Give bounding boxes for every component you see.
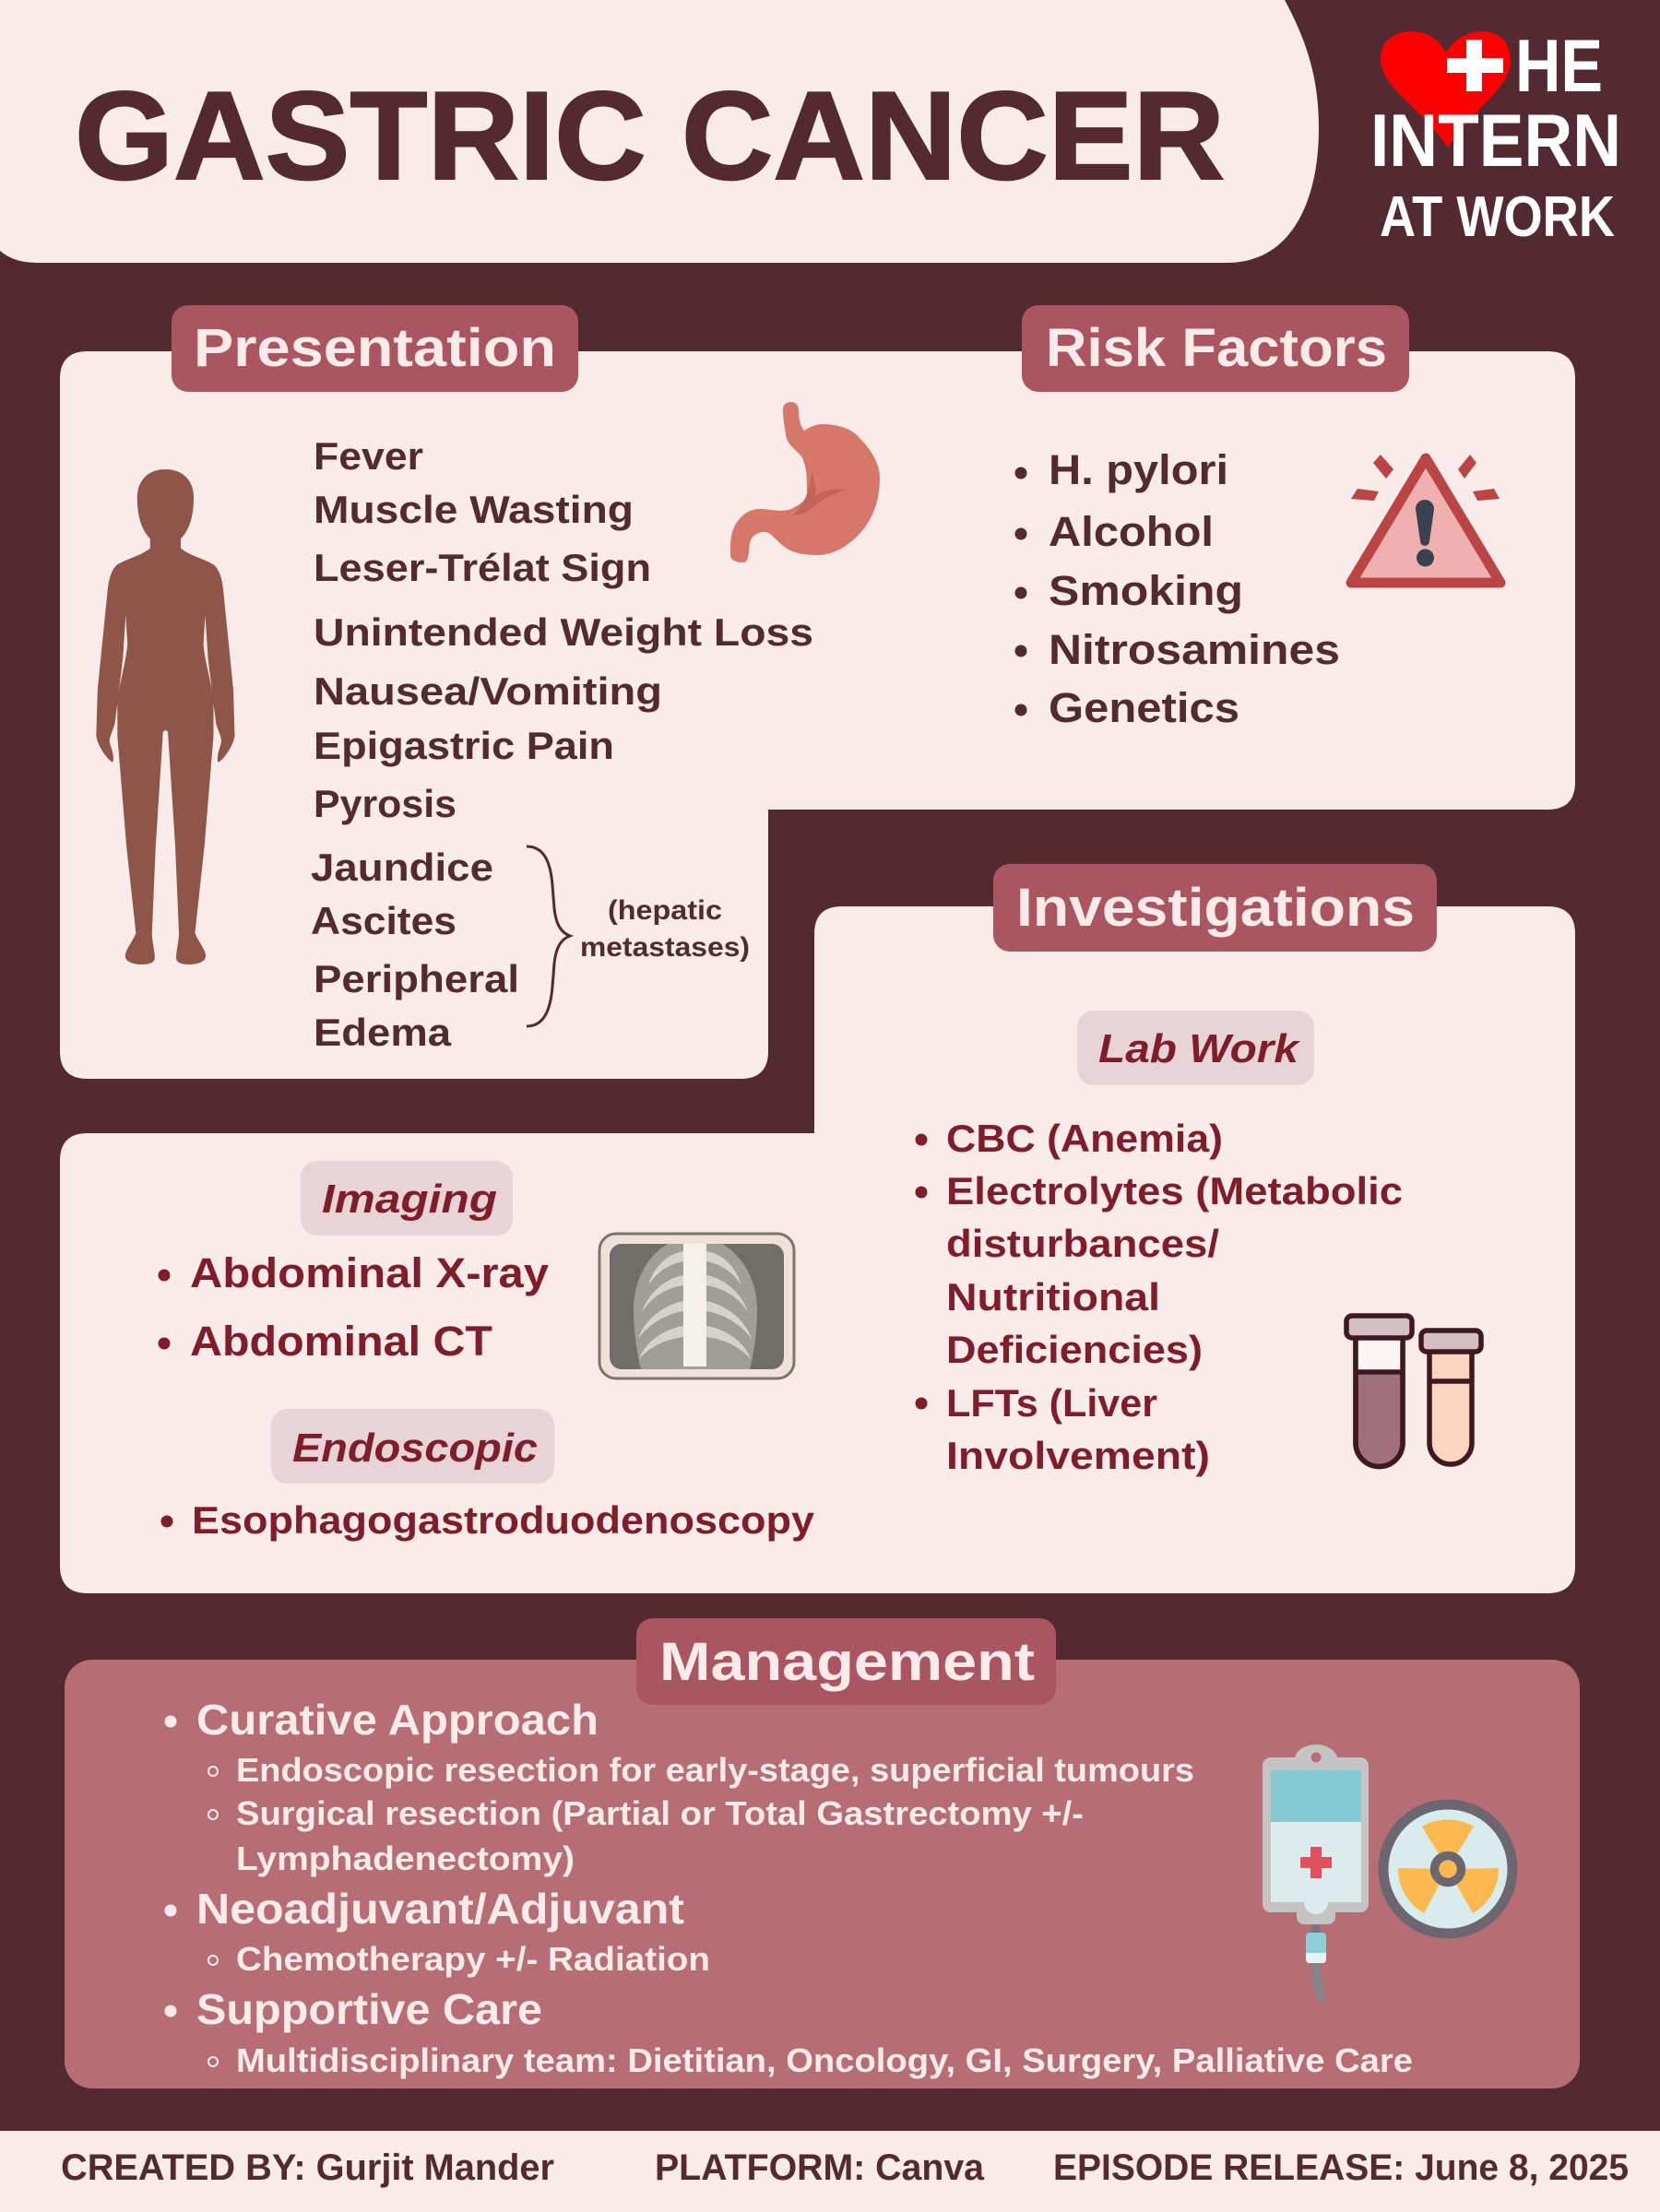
subheading: imaging	[301, 1161, 513, 1236]
lab work list: Electrolytes (Metabolic	[946, 1169, 1403, 1212]
icon: radiation symbol	[1383, 1804, 1512, 1934]
title banner	[0, 0, 1319, 263]
presentation symptom list: Pyrosis	[314, 782, 456, 825]
logo: The Intern at Work: AT WORK	[1380, 185, 1615, 249]
heading: risk factors	[1022, 305, 1409, 392]
presentation symptom list: Muscle Wasting	[314, 488, 634, 531]
lab work list: CBC (Anemia)	[946, 1117, 1223, 1160]
lab work list: Nutritional	[946, 1275, 1160, 1319]
management list: Endoscopic resection for early-stage, superficial tumours	[236, 1751, 1194, 1789]
risk factor list: Genetics	[1049, 684, 1239, 731]
icon: stomach	[730, 402, 880, 562]
footer	[0, 2131, 1660, 2212]
icon: warning triangle	[1351, 455, 1500, 583]
icon: human body silhouette	[97, 470, 234, 964]
imaging list	[159, 1249, 549, 1365]
presentation symptom list: Nausea/Vomiting	[314, 669, 662, 713]
management list	[164, 1696, 1413, 2079]
risk factor list: Nitrosamines	[1049, 626, 1340, 673]
heading: management: Management	[659, 1632, 1035, 1692]
logo: The Intern at Work: INTERN	[1370, 100, 1621, 183]
presentation symptom list: Leser-Trélat Sign	[314, 546, 651, 589]
management list: Curative Approach	[196, 1696, 599, 1744]
panel: investigations	[60, 864, 1575, 1593]
panel: presentation and risk factors	[60, 305, 1575, 1079]
presentation symptom list: Jaundice	[311, 846, 493, 889]
presentation symptom list: Ascites	[311, 899, 456, 942]
panel: management	[65, 1618, 1580, 2088]
management list: Chemotherapy +/- Radiation	[236, 1940, 710, 1978]
risk factor list: H. pylori	[1049, 446, 1228, 493]
lab work list: Deficiencies)	[946, 1328, 1203, 1371]
hepatic metastases note: (hepatic	[608, 895, 722, 926]
risk factor list: Alcohol	[1049, 508, 1214, 555]
imaging list: Abdominal X-ray	[190, 1249, 549, 1296]
title: GASTRIC CANCER	[75, 65, 1225, 206]
subheading: lab work: Lab Work	[1098, 1026, 1301, 1071]
presentation symptom list: Peripheral	[314, 957, 519, 1000]
lab work list: disturbances/	[946, 1222, 1219, 1265]
endoscopic list: Esophagogastroduodenoscopy	[192, 1498, 815, 1542]
presentation symptom list: Edema	[314, 1011, 452, 1054]
management list: Multidisciplinary team: Dietitian, Oncology, GI, Surgery, Palliative Care	[236, 2041, 1413, 2079]
subheading: endoscopic	[271, 1409, 554, 1484]
imaging list: Abdominal CT	[190, 1318, 492, 1365]
lab work list: LFTs (Liver	[946, 1381, 1157, 1425]
subheading: endoscopic: Endoscopic	[292, 1425, 538, 1471]
heading: management	[636, 1618, 1056, 1705]
risk factor list	[1014, 446, 1340, 731]
risk factor list: Smoking	[1049, 567, 1243, 614]
management list: Surgical resection (Partial or Total Gastrectomy +/-	[236, 1794, 1084, 1832]
presentation symptom list	[311, 434, 813, 1054]
lab work list: Involvement)	[946, 1434, 1210, 1477]
hepatic metastases note	[580, 895, 750, 963]
icon: x-ray film	[599, 1234, 794, 1378]
lab work list	[915, 1117, 1403, 1477]
icon: test tubes	[1346, 1316, 1481, 1466]
heading: presentation: Presentation	[194, 318, 556, 378]
hepatic metastases note: metastases)	[580, 932, 750, 963]
subheading: lab work	[1077, 1011, 1314, 1085]
footer: EPISODE RELEASE: June 8, 2025	[1053, 2147, 1629, 2188]
management list: Lymphadenectomy)	[236, 1839, 575, 1877]
presentation symptom list: Fever	[314, 434, 423, 478]
heading: investigations: Investigations	[1016, 878, 1415, 938]
subheading: imaging: Imaging	[322, 1177, 497, 1222]
presentation symptom list: Unintended Weight Loss	[314, 610, 813, 654]
management list: Supportive Care	[196, 1985, 542, 2033]
logo: The Intern at Work: HE	[1515, 25, 1603, 108]
footer: CREATED BY: Gurjit Mander	[61, 2147, 554, 2188]
footer: PLATFORM: Canva	[655, 2147, 985, 2188]
presentation symptom list: Epigastric Pain	[314, 724, 614, 767]
management list: Neoadjuvant/Adjuvant	[196, 1885, 684, 1933]
logo: The Intern at Work	[1370, 25, 1621, 249]
icon: IV bag	[1263, 1745, 1369, 2000]
heading: presentation	[172, 305, 578, 392]
brace	[527, 846, 570, 1026]
heading: risk factors: Risk Factors	[1046, 318, 1387, 378]
heading: investigations	[993, 864, 1437, 952]
